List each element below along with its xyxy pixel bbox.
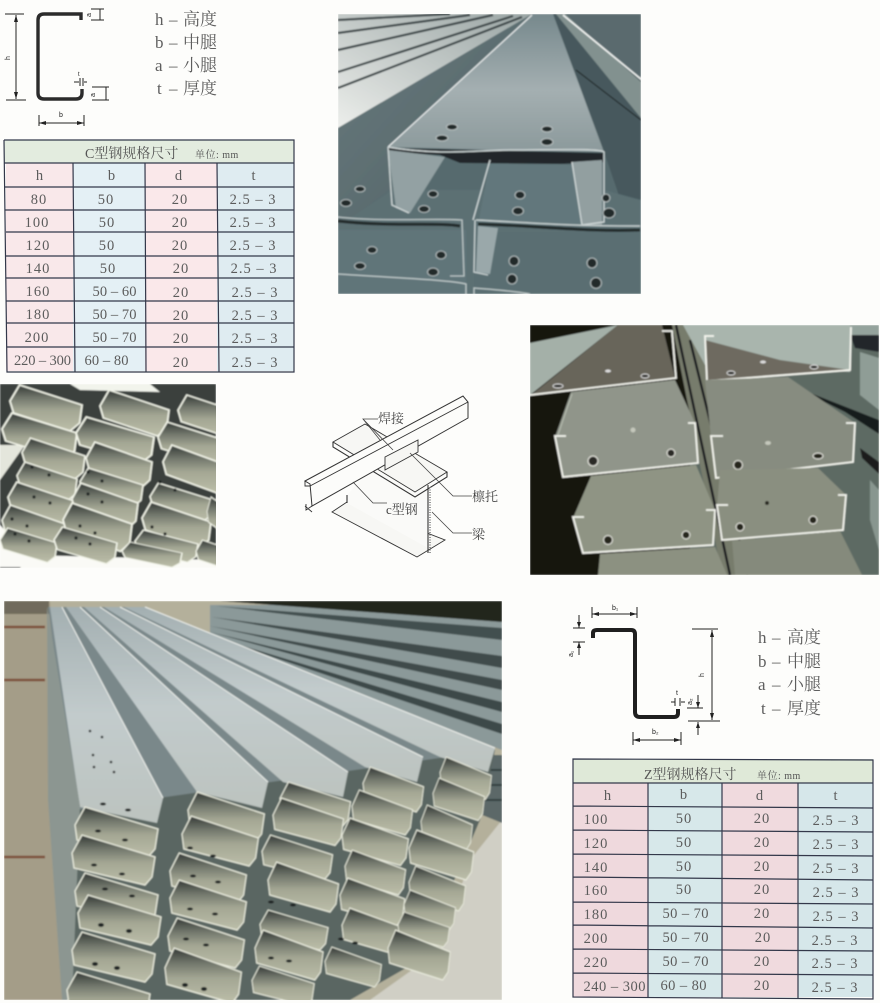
- flange dimension b1: [592, 605, 637, 618]
- legend, Z-section: 小腿: [787, 675, 821, 694]
- table Z rows: 50: [676, 835, 692, 851]
- table C rows: 50: [99, 215, 115, 231]
- Z-section dimension diagram: [568, 605, 720, 745]
- table Z rows: [584, 811, 859, 996]
- long beam top surfaces: [50, 607, 495, 823]
- thickness t: [671, 690, 685, 706]
- table C rows: 2.5 – 3: [232, 355, 278, 371]
- table C rows: 2.5 – 3: [232, 331, 278, 347]
- table C header: t: [251, 168, 257, 184]
- table Z rows: 2.5 – 3: [812, 956, 858, 972]
- table Z rows: 20: [754, 859, 770, 875]
- label: purlin support: 檩托: [472, 489, 498, 504]
- table C header: [36, 168, 257, 184]
- legend, C-section: 厚度: [183, 79, 217, 98]
- table Z rows: 50: [676, 811, 692, 827]
- legend, Z-section: –: [771, 628, 781, 647]
- table C rows: [14, 192, 278, 371]
- table Z rows: 140: [584, 860, 608, 876]
- table C rows: 20: [173, 261, 189, 277]
- purlin support plate: [385, 440, 418, 470]
- table Z rows: 20: [754, 811, 770, 827]
- photo: large stack of Z-section beams: [4, 601, 502, 1003]
- Z profile stack, left column: [0, 385, 85, 562]
- legend, Z-section: h: [758, 628, 766, 647]
- table C fills: [4, 140, 294, 371]
- label: beam: 梁: [472, 527, 486, 542]
- lip dimension a2: [687, 695, 703, 735]
- table C rows: 2.5 – 3: [230, 192, 276, 208]
- lower row beam faces: [338, 160, 641, 294]
- legend, Z-section: t: [761, 699, 766, 718]
- beam ends column 1: [67, 807, 161, 1003]
- table C rows: 2.5 – 3: [230, 215, 276, 231]
- table C rows: 220 – 300: [14, 353, 72, 369]
- table C rows: 60 – 80: [84, 353, 130, 369]
- table C rows: 20: [172, 238, 188, 254]
- legend, C-section: 小腿: [183, 56, 217, 75]
- table: Z-section sizes: [573, 759, 873, 999]
- table Z fills: [573, 759, 873, 997]
- table C rows: 50 – 60: [92, 284, 138, 300]
- table Z rows: 50 – 70: [662, 954, 710, 970]
- table C rows: 20: [173, 331, 189, 347]
- lip dimension a1: a₁: [568, 650, 575, 657]
- table C title: C型钢规格尺寸: [85, 147, 178, 162]
- thickness t: t: [676, 690, 678, 697]
- legend, C-section: –: [168, 79, 178, 98]
- legend, C-section: 中腿: [183, 33, 217, 52]
- legend, Z-section: [758, 628, 821, 718]
- lip dimension a2: a₂: [687, 698, 694, 705]
- width dimension b: b: [59, 112, 63, 119]
- legend, C-section: [155, 10, 217, 98]
- legend, Z-section: –: [771, 675, 781, 694]
- table Z rows: 20: [754, 906, 770, 922]
- table Z rows: 2.5 – 3: [813, 909, 859, 925]
- table Z rows: 20: [754, 882, 770, 898]
- table C rows: 50 – 70: [92, 330, 138, 346]
- label: C-section: c型钢: [386, 502, 418, 517]
- lip dimension a1: [568, 615, 585, 657]
- table C rows: 50: [100, 261, 116, 277]
- middle-right beam: [705, 377, 855, 478]
- table C rows: 160: [26, 284, 50, 300]
- label: weld: 焊接: [378, 411, 404, 426]
- photo: stacked Z-section beams: [0, 384, 216, 568]
- beam opening interior: [388, 147, 604, 225]
- table Z rows: 200: [584, 931, 608, 947]
- lip dimension a, top: a: [86, 13, 93, 17]
- table C header: h: [36, 168, 44, 184]
- C-section dimension diagram: [5, 9, 109, 126]
- flange dimension b2: b₂: [652, 729, 659, 736]
- beam ends column 3: [252, 782, 351, 1003]
- bolt holes: [89, 730, 358, 991]
- beam ends column 5: [388, 757, 491, 980]
- right background beams: [690, 325, 879, 575]
- table C rows: 20: [173, 308, 189, 324]
- C profile outline: [38, 14, 82, 99]
- leader lines: [353, 419, 472, 533]
- dark side of main beam: [338, 48, 478, 200]
- table Z rows: 2.5 – 3: [813, 813, 859, 829]
- table Z rows: 2.5 – 3: [813, 885, 859, 901]
- Z profile outline: [593, 630, 678, 717]
- legend, C-section: t: [157, 79, 162, 98]
- table C rows: 50 – 70: [92, 307, 138, 323]
- table Z rows: 2.5 – 3: [813, 861, 859, 877]
- table C header: d: [175, 168, 183, 184]
- flange dimension b1: b₁: [612, 605, 619, 612]
- table C rows: 2.5 – 3: [230, 238, 276, 254]
- table Z rows: 20: [754, 978, 770, 994]
- thickness t: t: [78, 72, 80, 78]
- photo: C-section beam close-up: [338, 14, 642, 294]
- table Z rows: 100: [584, 812, 608, 828]
- table C title: 单位: mm: [195, 148, 239, 161]
- Z profile stack, centre column: [54, 390, 169, 564]
- table C rows: 20: [173, 285, 189, 301]
- legend, C-section: b: [155, 33, 164, 52]
- table Z rows: 50 – 70: [662, 930, 710, 946]
- table C rows: 20: [172, 215, 188, 231]
- legend, Z-section: 中腿: [787, 652, 821, 671]
- table C rows: 20: [173, 355, 189, 371]
- table Z rows: 20: [755, 930, 771, 946]
- connection detail drawing: [305, 396, 498, 557]
- table Z header: h: [604, 788, 612, 804]
- legend, C-section: –: [168, 10, 178, 29]
- height dimension h: h: [5, 56, 12, 60]
- bottom beams: [598, 531, 862, 575]
- lower-left beam: [573, 465, 715, 553]
- legend, Z-section: a: [758, 675, 766, 694]
- top-left beam: [530, 325, 676, 396]
- table C rows: 120: [26, 238, 50, 254]
- table C rows: 180: [26, 307, 50, 323]
- table Z rows: 50 – 70: [662, 906, 710, 922]
- table C rows: 140: [26, 261, 50, 277]
- legend, C-section: h: [155, 10, 164, 29]
- table C rows: 50: [98, 192, 114, 208]
- table Z rows: 50: [676, 859, 692, 875]
- table Z rows: 180: [584, 907, 608, 923]
- middle-left beam: [555, 380, 698, 477]
- table C rows: 2.5 – 3: [231, 261, 277, 277]
- light stacked beams, upper left: [338, 14, 532, 128]
- photo: stacked C-section beams on rack: [530, 325, 879, 575]
- trough sides between beams: [48, 606, 442, 810]
- table C rows: 2.5 – 3: [232, 285, 278, 301]
- table Z title: Z型钢规格尺寸: [644, 768, 737, 783]
- left outer wall: [47, 607, 80, 1000]
- legend, C-section: –: [168, 56, 178, 75]
- table Z rows: 60 – 80: [660, 978, 708, 994]
- legend, Z-section: b: [758, 652, 766, 671]
- legend, Z-section: –: [771, 652, 781, 671]
- table C header: b: [108, 168, 116, 184]
- legend, C-section: 高度: [183, 10, 217, 29]
- table Z rows: 2.5 – 3: [812, 980, 858, 996]
- flange dimension b2: [633, 729, 681, 745]
- legend, C-section: a: [155, 56, 163, 75]
- table C rows: 50: [99, 238, 115, 254]
- I-beam lower flange: [332, 502, 445, 557]
- beam ends column 2: [165, 792, 264, 1003]
- table: C-section sizes: [4, 140, 294, 372]
- table Z header: d: [756, 788, 764, 804]
- legend, Z-section: 高度: [787, 628, 821, 647]
- background stack of dark beams: [210, 601, 502, 823]
- right side beams: [554, 14, 641, 200]
- top-right beam: [683, 325, 851, 381]
- table Z rows: 50: [676, 882, 692, 898]
- table Z rows: 20: [754, 835, 770, 851]
- white blown-out corners: [0, 384, 216, 568]
- bolt holes: [340, 124, 615, 288]
- legend, Z-section: 厚度: [787, 699, 821, 718]
- dark mass behind beam ends: [72, 750, 495, 1000]
- table C rows: 2.5 – 3: [232, 308, 278, 324]
- table Z header: [604, 787, 839, 804]
- top surface of main beam: [388, 14, 604, 152]
- I-beam web: [347, 460, 428, 548]
- table C rows: 200: [25, 330, 49, 346]
- table Z header: b: [680, 787, 688, 803]
- table Z header: t: [833, 788, 839, 804]
- lower-right beam: [717, 468, 846, 540]
- bolt holes: [10, 465, 177, 546]
- ground: [4, 601, 502, 1000]
- table Z rows: 220: [584, 955, 608, 971]
- lower beams end profiles: [338, 217, 640, 294]
- table Z rows: 160: [584, 883, 608, 899]
- table C rows: 20: [172, 192, 188, 208]
- lip dimension a, bottom: a: [90, 93, 97, 97]
- table Z rows: 2.5 – 3: [813, 837, 859, 853]
- height dimension h: [688, 629, 720, 721]
- beam ends column 4: [325, 767, 424, 987]
- table Z rows: 120: [584, 836, 608, 852]
- C-section purlin: [305, 396, 468, 506]
- height dimension h: h: [699, 673, 706, 677]
- table Z title: 单位: mm: [757, 769, 801, 782]
- table Z rows: 240 – 300: [584, 979, 646, 995]
- table C rows: 80: [31, 192, 47, 208]
- central rack rails: [671, 325, 740, 575]
- legend, C-section: –: [168, 33, 178, 52]
- Z profile stack, right column: [120, 393, 216, 568]
- legend, Z-section: –: [771, 699, 781, 718]
- I-beam upper flange: [333, 424, 447, 492]
- table Z rows: 20: [754, 954, 770, 970]
- table C rows: 100: [25, 215, 49, 231]
- table Z rows: 2.5 – 3: [812, 933, 858, 949]
